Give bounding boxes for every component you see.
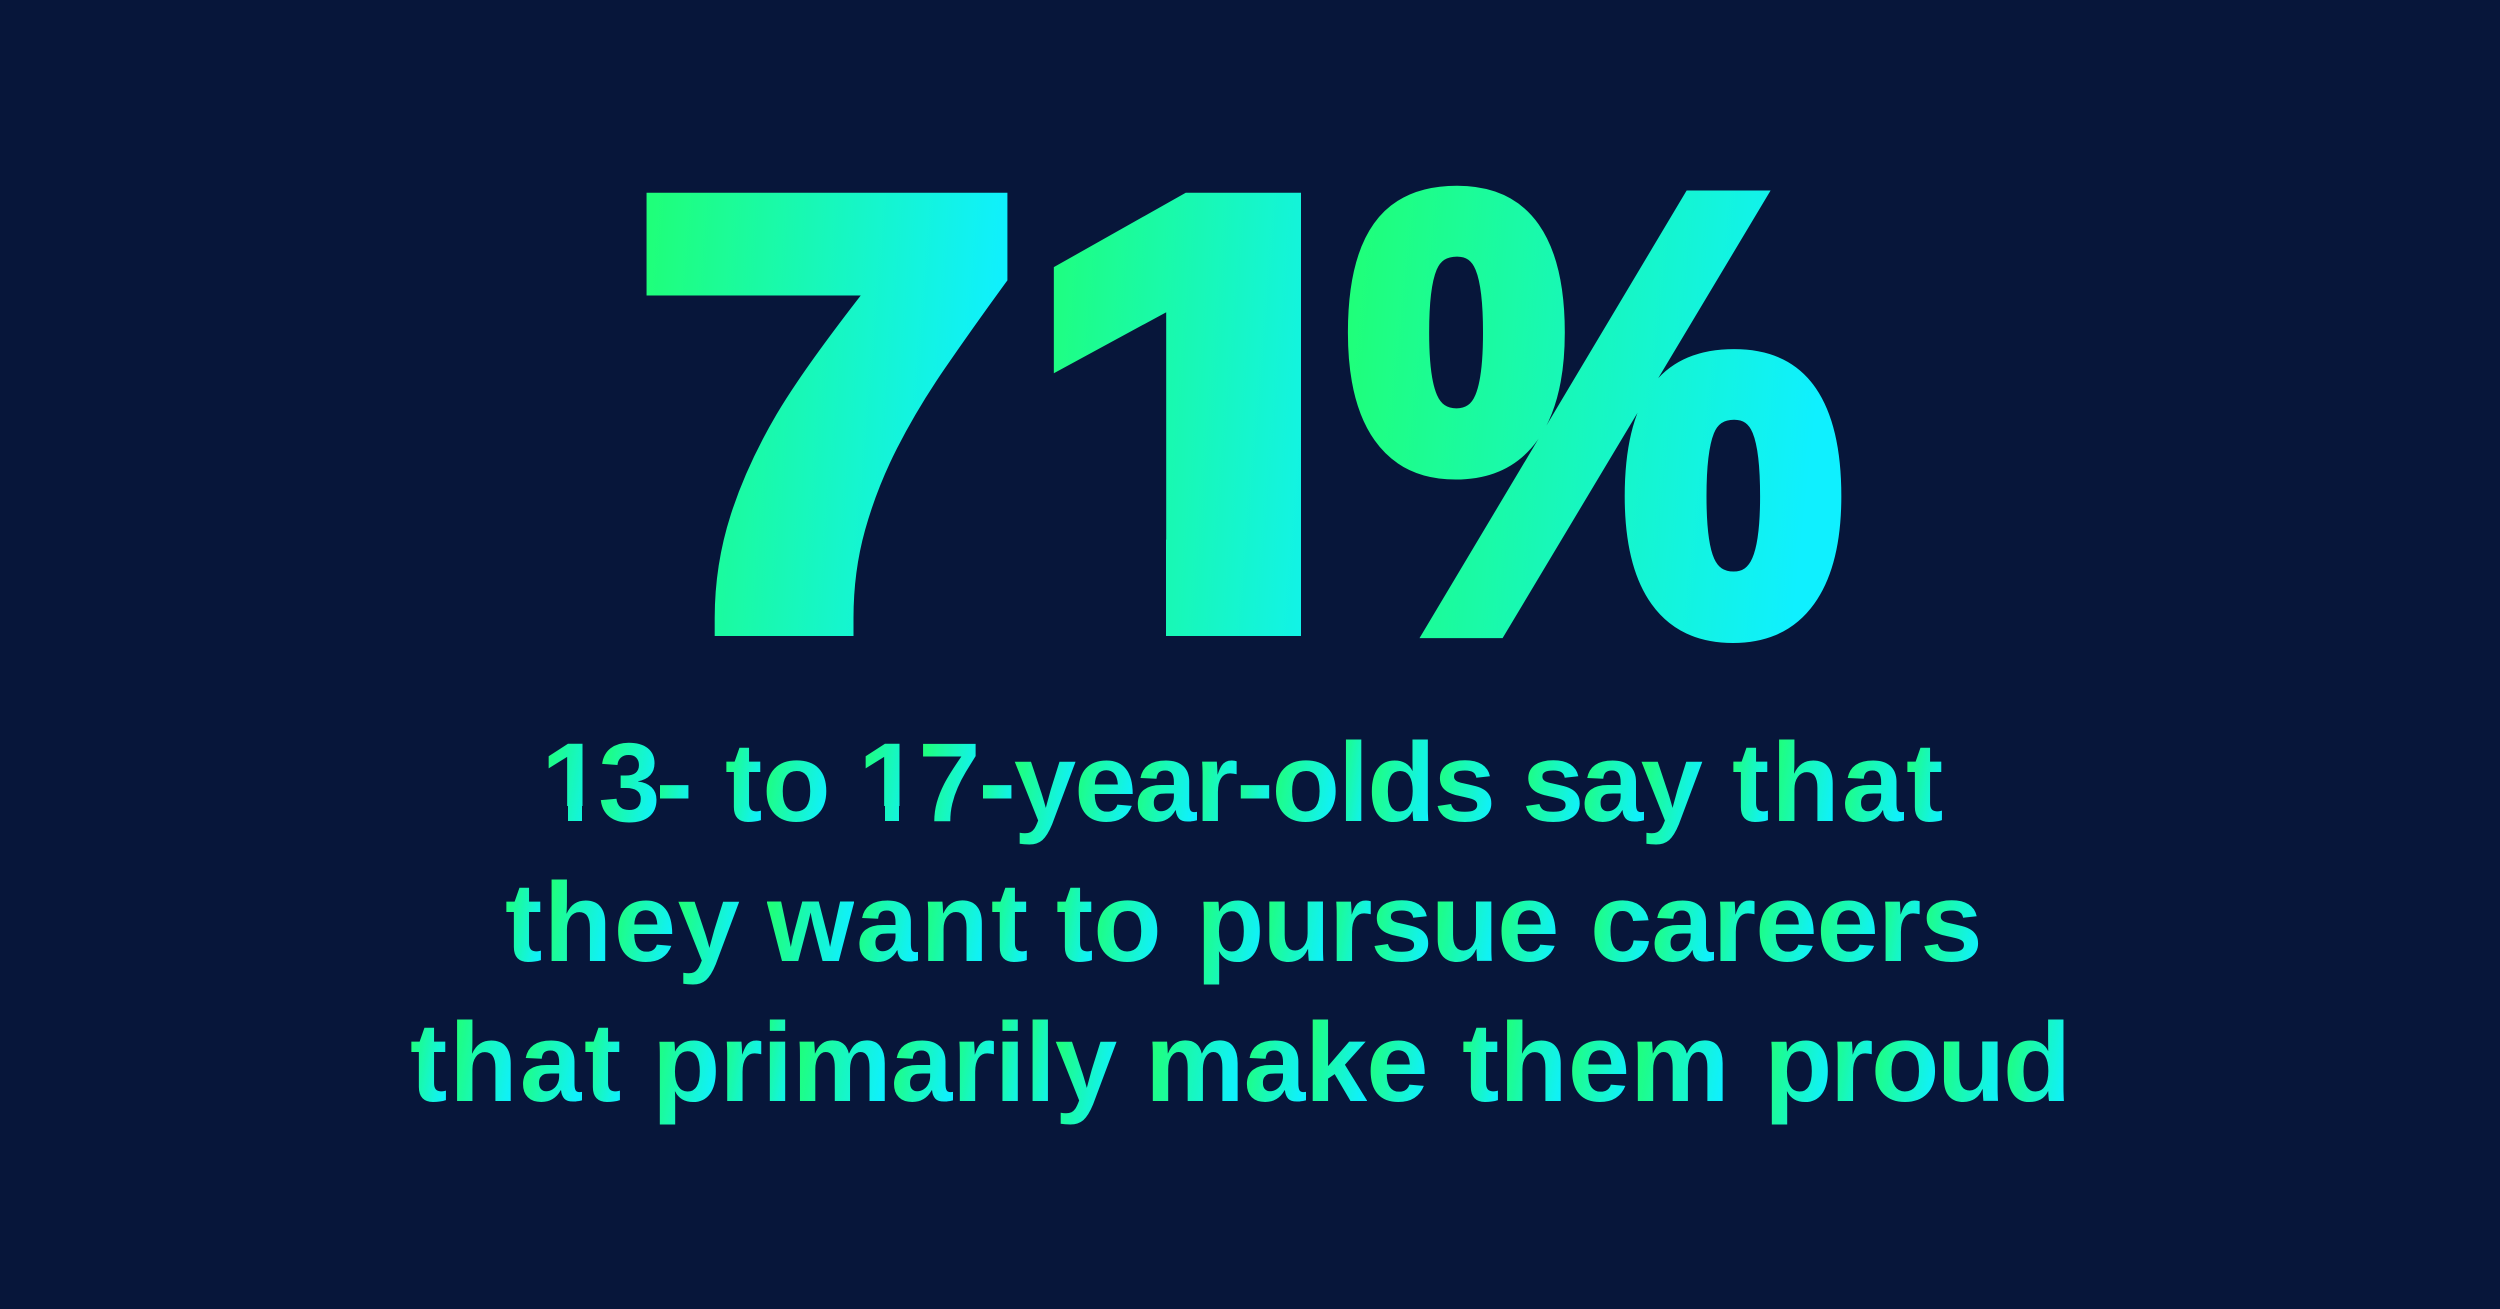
caption line 2	[505, 860, 1983, 985]
caption line 2: o	[1093, 860, 1162, 985]
caption line 2: n	[920, 860, 989, 985]
caption line 3: t	[410, 1000, 447, 1125]
caption line 3: t	[584, 1000, 621, 1125]
caption line 3: r	[719, 1000, 763, 1125]
caption line 2: e	[614, 860, 676, 985]
caption line 2: y	[678, 860, 740, 985]
caption line 2: a	[856, 860, 918, 985]
caption line 1: d	[1367, 720, 1436, 845]
caption line 1	[548, 720, 1943, 845]
caption line 2: s	[1920, 860, 1983, 985]
caption line 3: a	[891, 1000, 953, 1125]
caption line 3: d	[2003, 1000, 2071, 1125]
digit 7: 7	[638, 83, 1017, 744]
caption line 3: e	[1366, 1000, 1428, 1125]
caption line 1: y	[1641, 720, 1703, 845]
caption line 3: m	[792, 1000, 892, 1125]
caption line 1: a	[1842, 720, 1904, 845]
caption line 1: t	[725, 720, 762, 845]
caption line 3: a	[520, 1000, 582, 1125]
caption line 3	[410, 1000, 2071, 1125]
caption line 3: k	[1305, 1000, 1367, 1125]
caption line 2: t	[505, 860, 542, 985]
percent sign: %	[1345, 69, 1845, 756]
caption line 1: -	[979, 720, 1016, 845]
caption line 1: t	[1906, 720, 1943, 845]
digit 1: 1	[1028, 83, 1407, 744]
caption line 3: p	[652, 1000, 720, 1125]
caption line 1: 3	[598, 720, 661, 845]
caption line 2: u	[1431, 860, 1499, 985]
caption line 1: s	[1522, 720, 1584, 845]
caption line 3: y	[1055, 1000, 1117, 1125]
caption line 1: 7	[918, 720, 981, 845]
caption line 2: p	[1196, 860, 1264, 985]
caption line 2: r	[1713, 860, 1756, 985]
caption line 2: e	[1497, 860, 1559, 985]
caption line 3: i	[762, 1000, 793, 1125]
caption line 2: t	[991, 860, 1028, 985]
caption line 1: s	[1434, 720, 1496, 845]
caption line 3: m	[1630, 1000, 1730, 1125]
caption line 2: t	[1056, 860, 1093, 985]
caption line 2: w	[767, 860, 854, 985]
caption line 2: a	[1651, 860, 1714, 985]
caption line 2: e	[1816, 860, 1879, 985]
caption line 1: y	[1014, 720, 1076, 845]
caption line 2: c	[1590, 860, 1652, 985]
caption line 3: p	[1764, 1000, 1832, 1125]
caption line 2: r	[1878, 860, 1921, 985]
caption line 2: e	[1755, 860, 1817, 985]
caption line 2: s	[1370, 860, 1433, 985]
caption line 2: u	[1262, 860, 1331, 985]
caption line 3: u	[1937, 1000, 2005, 1125]
caption line 3: t	[1462, 1000, 1499, 1125]
caption line 3: h	[449, 1000, 518, 1125]
caption line 1: o	[1272, 720, 1340, 845]
big statistic: 71%	[646, 186, 1842, 643]
caption line 3: l	[1025, 1000, 1056, 1125]
caption line 1: a	[1134, 720, 1197, 845]
caption line 1: l	[1338, 720, 1369, 845]
caption line 1: t	[1732, 720, 1769, 845]
caption line 3: m	[1145, 1000, 1245, 1125]
caption line 1: -	[656, 720, 693, 845]
caption line 3: r	[1830, 1000, 1874, 1125]
caption line 1: -	[1236, 720, 1274, 845]
caption line 3: o	[1871, 1000, 1939, 1125]
caption line 3: a	[1244, 1000, 1306, 1125]
caption line 1: 1	[541, 720, 603, 845]
caption line 1: a	[1581, 720, 1644, 845]
caption line 1: h	[1771, 720, 1840, 845]
caption line 1: r	[1195, 720, 1238, 845]
caption line 3: e	[1568, 1000, 1630, 1125]
caption line 2: h	[544, 860, 612, 985]
caption line 3: i	[995, 1000, 1026, 1125]
caption line 3: r	[952, 1000, 996, 1125]
caption line 1: 1	[858, 720, 920, 845]
caption line 2: r	[1329, 860, 1372, 985]
caption line 1: e	[1074, 720, 1136, 845]
caption line 3: h	[1499, 1000, 1568, 1125]
caption text	[410, 720, 2071, 1125]
caption line 1: o	[762, 720, 831, 845]
